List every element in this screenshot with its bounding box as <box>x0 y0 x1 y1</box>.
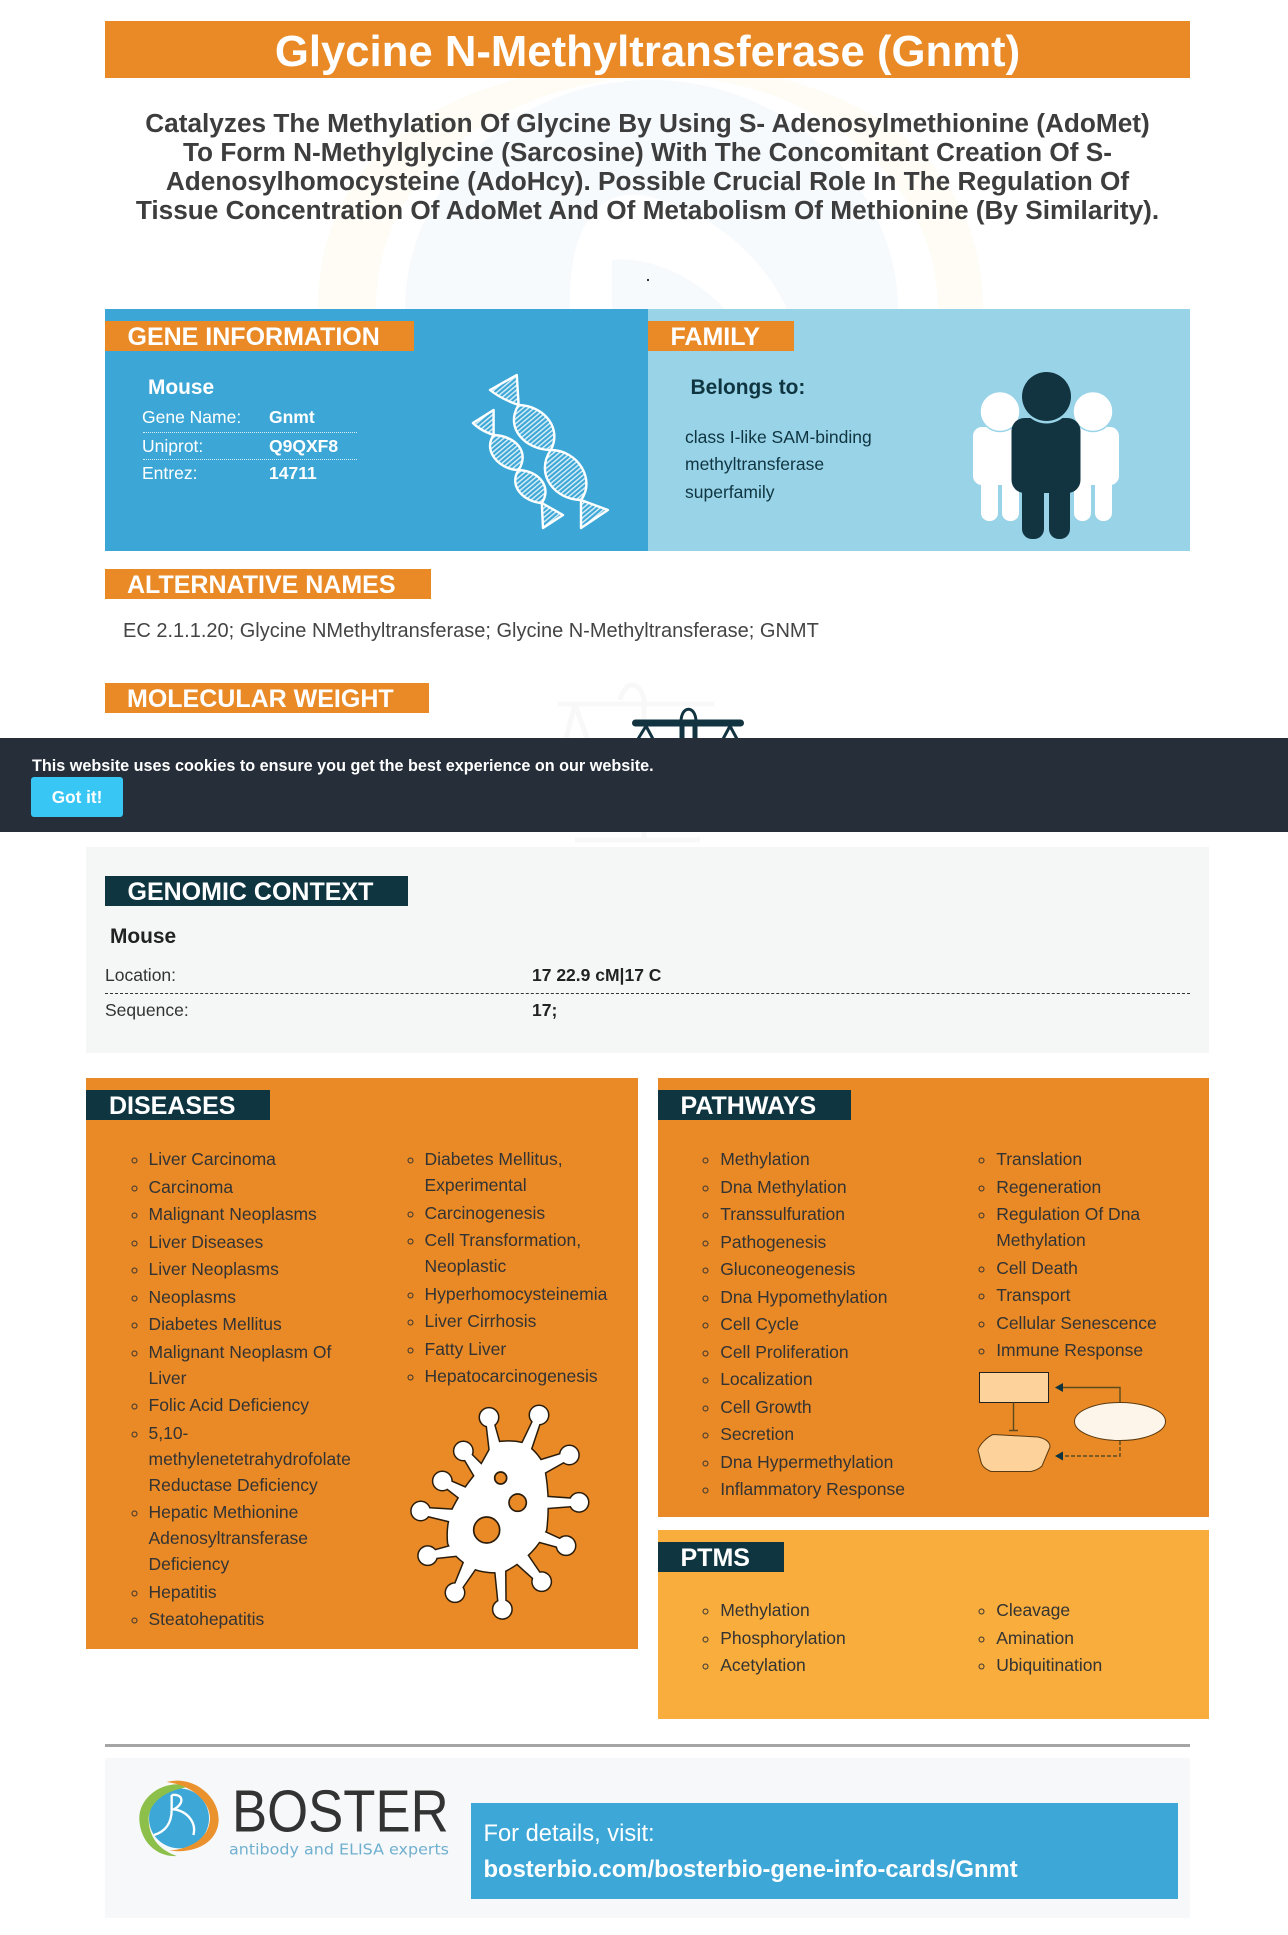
species label: Mouse <box>148 376 214 399</box>
boster logo <box>139 1778 449 1858</box>
family text: methyltransferase <box>685 454 824 474</box>
diseases list column 2: Experimental <box>424 1175 527 1195</box>
stray dot <box>647 279 649 281</box>
pathways list column 1: Gluconeogenesis <box>720 1259 855 1279</box>
cookie message: This website uses cookies to ensure you get the best experience on our website. <box>32 757 654 775</box>
pathways list column 1: Dna Hypomethylation <box>720 1286 888 1306</box>
pathways list column 1: Dna Methylation <box>720 1176 847 1196</box>
diseases list column 1: Liver <box>148 1368 186 1388</box>
ptms list column 2 <box>978 1600 1102 1675</box>
pathways list column 2: Cell Death <box>996 1258 1078 1278</box>
details box <box>471 1803 1178 1899</box>
diseases list column 1: Folic Acid Deficiency <box>148 1395 309 1415</box>
genomic species: Mouse <box>110 925 176 948</box>
details url: bosterbio.com/bosterbio-gene-info-cards/Gnmt <box>484 1856 1018 1883</box>
description text <box>136 108 1159 225</box>
panel: ptms <box>658 1530 1209 1719</box>
pathways list column 1: Cell Growth <box>720 1396 812 1416</box>
heading: ptms: PTMS <box>680 1544 750 1572</box>
pathways list column 2: Immune Response <box>996 1340 1143 1360</box>
icon: people <box>973 372 1119 539</box>
icon: virus <box>410 1404 590 1620</box>
location row: Location: <box>105 964 176 984</box>
gene info table: Entrez: <box>142 463 197 483</box>
pathways list column 1: Pathogenesis <box>720 1232 826 1252</box>
cookie banner <box>0 738 1288 832</box>
pathways list column 1: Cell Cycle <box>720 1314 799 1334</box>
family text <box>685 426 872 502</box>
background watermark logo <box>318 78 983 309</box>
diseases list column 2: Liver Cirrhosis <box>424 1311 536 1331</box>
diseases list column 1: Malignant Neoplasms <box>148 1204 317 1224</box>
sequence row <box>105 1000 557 1020</box>
diseases list column 2: Hepatocarcinogenesis <box>424 1366 598 1386</box>
diseases list column 1: Hepatic Methionine <box>148 1502 298 1522</box>
panel: gene information <box>105 309 648 550</box>
footer rule <box>105 1744 1190 1747</box>
panel: genomic context <box>86 847 1209 1052</box>
ptms list column 2: Amination <box>996 1628 1074 1648</box>
pathways list column 2: Regulation Of Dna <box>996 1204 1140 1224</box>
ptms list column 1: Phosphorylation <box>720 1628 846 1648</box>
heading: genomic context: GENOMIC CONTEXT <box>128 878 373 906</box>
pathways list column 2: Transport <box>996 1285 1070 1305</box>
pathways list column 1: Localization <box>720 1369 813 1389</box>
diseases list column 2 <box>408 1149 608 1386</box>
diseases list column 1: Deficiency <box>148 1554 229 1574</box>
diseases list column 2: Neoplastic <box>424 1256 506 1276</box>
heading: family <box>648 321 794 351</box>
heading: pathways: PATHWAYS <box>680 1092 816 1120</box>
boster logo: antibody and ELISA experts <box>229 1840 449 1858</box>
sequence row: Sequence: <box>105 1000 189 1020</box>
icon: pathway diagram <box>978 1372 1166 1472</box>
gene info table: Q9QXF8 <box>269 436 338 456</box>
diseases list column 1 <box>132 1149 351 1629</box>
ptms list column 1 <box>702 1600 846 1675</box>
family subheading: Belongs to: <box>690 376 805 399</box>
heading: diseases <box>86 1090 270 1120</box>
title banner: Glycine N-Methyltransferase (Gnmt) <box>275 27 1020 76</box>
ptms list column 1: Acetylation <box>720 1655 806 1675</box>
diseases list column 1: Hepatitis <box>148 1582 217 1602</box>
gene info table: Gene Name: <box>142 407 241 427</box>
diseases list column 1: Reductase Deficiency <box>148 1474 318 1494</box>
heading: ptms <box>658 1542 784 1572</box>
diseases list column 1: Liver Carcinoma <box>148 1149 276 1169</box>
pathways list column 2: Methylation <box>996 1230 1086 1250</box>
icon: balance scale <box>632 708 744 738</box>
pathways list column 1: Transsulfuration <box>720 1204 845 1224</box>
ptms list column 1: Methylation <box>720 1600 810 1620</box>
cookie button <box>31 777 123 817</box>
pathways list column 1: Secretion <box>720 1424 794 1444</box>
panel: pathways <box>658 1078 1209 1517</box>
diseases list column 1: Liver Diseases <box>148 1232 263 1252</box>
ptms list column 2: Cleavage <box>996 1600 1070 1620</box>
location row <box>105 964 661 985</box>
cookie button: Got it! <box>52 787 102 807</box>
diseases list column 1: Carcinoma <box>148 1176 233 1196</box>
sequence row: 17; <box>532 1000 557 1020</box>
description text: Adenosylhomocysteine (AdoHcy). Possible Crucial Role In The Regulation Of <box>166 166 1129 196</box>
diseases list column 1: Neoplasms <box>148 1286 236 1306</box>
heading: gene information: GENE INFORMATION <box>128 323 380 351</box>
pathways list column 1: Inflammatory Response <box>720 1479 905 1499</box>
description text: Tissue Concentration Of AdoMet And Of Metabolism Of Methionine (By Similarity). <box>136 195 1159 225</box>
diseases list column 1: Liver Neoplasms <box>148 1259 279 1279</box>
diseases list column 2: Hyperhomocysteinemia <box>424 1284 607 1304</box>
diseases list column 1: Diabetes Mellitus <box>148 1314 282 1334</box>
pathways list column 2 <box>978 1149 1157 1360</box>
icon: dna helices <box>472 374 610 530</box>
diseases list column 1: Malignant Neoplasm Of <box>148 1342 331 1362</box>
footer panel <box>105 1758 1190 1918</box>
pathways list column 1 <box>702 1149 905 1499</box>
diseases list column 1: Steatohepatitis <box>148 1609 264 1629</box>
description text: To Form N-Methylglycine (Sarcosine) With The Concomitant Creation Of S- <box>183 137 1112 167</box>
diseases list column 2: Diabetes Mellitus, <box>424 1149 563 1169</box>
heading: family: FAMILY <box>670 323 760 351</box>
diseases list column 2: Carcinogenesis <box>424 1202 545 1222</box>
location row: 17 22.9 cM|17 C <box>532 964 661 984</box>
gene info table: Gnmt <box>269 407 315 427</box>
gene info table <box>142 407 357 483</box>
pathways list column 1: Dna Hypermethylation <box>720 1452 893 1472</box>
heading: pathways <box>658 1090 851 1120</box>
title banner <box>105 21 1190 78</box>
pathways list column 2: Regeneration <box>996 1176 1101 1196</box>
family text: class I-like SAM-binding <box>685 426 872 446</box>
diseases list column 1: methylenetetrahydrofolate <box>148 1448 351 1468</box>
diseases list column 1: 5,10- <box>148 1422 188 1442</box>
boster logo: BOSTER <box>232 1778 449 1845</box>
panel: diseases <box>86 1078 638 1649</box>
pathways list column 1: Methylation <box>720 1149 810 1169</box>
description text: Catalyzes The Methylation Of Glycine By Using S- Adenosylmethionine (AdoMet) <box>145 108 1150 138</box>
gene info table: 14711 <box>269 463 317 483</box>
diseases list column 1: Adenosyltransferase <box>148 1528 308 1548</box>
heading: diseases: DISEASES <box>109 1092 235 1120</box>
gene info table: Uniprot: <box>142 436 203 456</box>
details label: For details, visit: <box>484 1821 655 1847</box>
panel: family <box>648 309 1190 550</box>
diseases list column 2: Cell Transformation, <box>424 1230 581 1250</box>
alternative names text: EC 2.1.1.20; Glycine NMethyltransferase; Glycine N-Methyltransferase; GNMT <box>123 620 819 642</box>
family text: superfamily <box>685 482 774 502</box>
diseases list column 2: Fatty Liver <box>424 1338 506 1358</box>
pathways list column 1: Cell Proliferation <box>720 1342 849 1362</box>
pathways list column 2: Translation <box>996 1149 1082 1169</box>
heading: alternative names: ALTERNATIVE NAMES <box>127 571 396 599</box>
pathways list column 2: Cellular Senescence <box>996 1312 1157 1332</box>
heading: molecular weight: MOLECULAR WEIGHT <box>127 685 394 713</box>
ptms list column 2: Ubiquitination <box>996 1655 1102 1675</box>
